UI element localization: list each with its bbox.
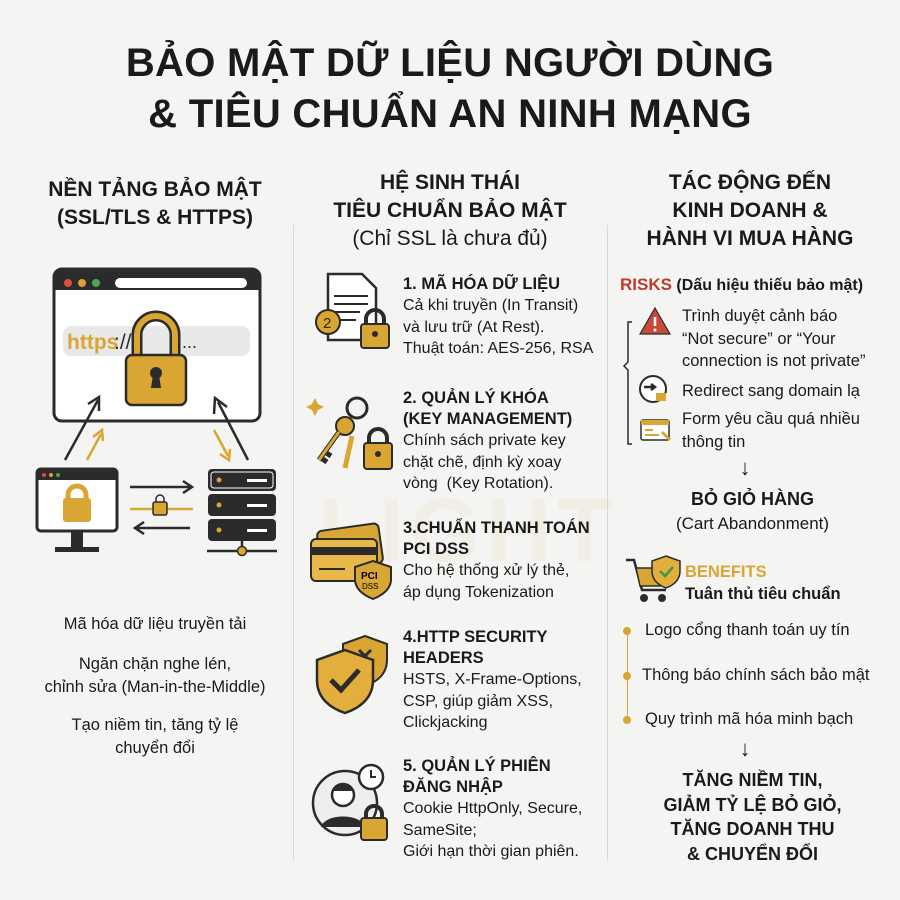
watermark: LIGHT — [318, 481, 618, 581]
item 5: session management: 5. QUẢN LÝ PHIÊN — [403, 757, 551, 775]
heading: left column — [48, 176, 262, 229]
icon: keys — [306, 396, 393, 470]
heading: risks: RISKS (Dấu hiệu thiếu bảo mật) — [620, 275, 863, 294]
item 5: session management — [312, 756, 582, 860]
heading: middle column: (Chỉ SSL là chưa đủ) — [352, 227, 548, 250]
heading: benefits: BENEFITS — [685, 563, 767, 581]
arrow: ↓ — [740, 736, 750, 761]
arrow: ↓ — [740, 455, 750, 480]
icon: document lock — [315, 272, 390, 349]
text block: left benefits: Mã hóa dữ liệu truyền tải Ngăn chặn nghe lén, — [64, 615, 246, 673]
icon: client monitor — [37, 469, 117, 552]
heading: right column — [647, 170, 853, 250]
item 4: HTTP security headers: HEADERS — [403, 649, 484, 667]
item 2: key management: chặt chẽ, định kỳ xoay — [403, 454, 561, 470]
browser window: :// — [114, 331, 132, 354]
heading: benefits — [685, 563, 841, 603]
risks list — [623, 306, 865, 450]
risks list: “Not secure” or “Your — [682, 330, 835, 348]
browser window: ... — [182, 332, 197, 352]
heading: right column: KINH DOANH & — [672, 199, 828, 222]
benefits list — [623, 621, 870, 728]
benefits list: Thông báo chính sách bảo mật — [642, 666, 870, 684]
result: final outcome — [663, 770, 842, 864]
heading: middle column: HỆ SINH THÁI — [380, 171, 520, 194]
icon: cart shield — [626, 555, 681, 602]
result: cart abandonment: BỎ GIỎ HÀNG — [691, 489, 814, 509]
icon: big padlock — [126, 316, 186, 405]
text block: left benefits: chỉnh sửa (Man-in-the-Middle) Tạo niềm tin, tăng tỷ lệ — [44, 678, 266, 734]
result: final outcome: TĂNG NIỀM TIN, — [682, 770, 822, 790]
item 1: data encryption: 1. MÃ HÓA DỮ LIỆU — [403, 275, 560, 293]
item 5: session management: ĐĂNG NHẬP — [403, 778, 503, 796]
heading: middle column: TIÊU CHUẨN BẢO MẬT — [333, 199, 567, 222]
risks list: Trình duyệt cảnh báo — [682, 307, 837, 325]
title — [126, 40, 774, 136]
icon: shields — [316, 634, 388, 714]
heading: left column: (SSL/TLS & HTTPS) — [57, 206, 253, 229]
title: & TIÊU CHUẨN AN NINH MẠNG — [148, 92, 752, 136]
item 1: data encryption: Cả khi truyền (In Transit) — [403, 297, 578, 314]
result: final outcome: GIẢM TỶ LỆ BỎ GIỎ, — [663, 794, 842, 814]
benefits list: Logo cổng thanh toán uy tín — [645, 621, 850, 639]
item 2: key management: 2. QUẢN LÝ KHÓA — [403, 389, 549, 407]
icon: user clock lock — [312, 764, 388, 841]
heading: middle column — [333, 170, 567, 250]
item 5: session management: SameSite; — [403, 822, 477, 838]
item 3: PCI DSS: 3.CHUẨN THANH TOÁN — [403, 519, 590, 537]
item 5: session management: Giới hạn thời gian phiên. — [403, 843, 579, 860]
browser window: https — [67, 331, 118, 354]
arrows — [65, 397, 248, 534]
text block: left benefits — [44, 615, 266, 757]
title: BẢO MẬT DỮ LIỆU NGƯỜI DÙNG — [126, 41, 774, 85]
item 3: PCI DSS: áp dụng Tokenization — [403, 584, 554, 600]
heading: left column: NỀN TẢNG BẢO MẬT — [48, 178, 262, 201]
item 4: HTTP security headers: HSTS, X-Frame-Options, — [403, 671, 582, 688]
item 4: HTTP security headers — [316, 628, 582, 731]
result: cart abandonment: (Cart Abandonment) — [676, 514, 829, 533]
item 4: HTTP security headers: CSP, giúp giảm XSS, — [403, 692, 553, 710]
item 4: HTTP security headers: Clickjacking — [403, 714, 487, 731]
heading: benefits: Tuân thủ tiêu chuẩn — [685, 585, 841, 603]
item 1: data encryption: Thuật toán: AES-256, RSA — [403, 340, 593, 357]
item 3: PCI DSS — [310, 518, 590, 600]
heading: right column: HÀNH VI MUA HÀNG — [647, 227, 853, 250]
heading: right column: TÁC ĐỘNG ĐẾN — [669, 171, 831, 194]
icon: document lock: 2 — [323, 315, 331, 332]
item 2: key management: Chính sách private key — [403, 432, 566, 449]
benefits list: Quy trình mã hóa minh bạch — [645, 710, 853, 728]
risks list: connection is not private” Redirect sang domain lạ Form yêu cầu quá nhiều — [682, 352, 865, 428]
icon: server — [207, 469, 277, 556]
result: cart abandonment — [676, 488, 829, 533]
icon: card PCI: PCI — [361, 571, 378, 582]
result: final outcome: TĂNG DOANH THU — [670, 819, 834, 839]
browser window — [54, 269, 260, 421]
item 1: data encryption: và lưu trữ (At Rest). — [403, 318, 544, 336]
item 3: PCI DSS: PCI DSS — [403, 540, 469, 558]
item 2: key management: vòng (Key Rotation). — [403, 475, 553, 492]
item 2: key management: (KEY MANAGEMENT) — [403, 410, 572, 428]
result: final outcome: & CHUYỂN ĐỔI — [687, 844, 818, 864]
item 3: PCI DSS: Cho hệ thống xử lý thẻ, — [403, 562, 569, 579]
item 4: HTTP security headers: 4.HTTP SECURITY — [403, 628, 548, 646]
risks list: thông tin — [682, 432, 745, 450]
illustration: HTTPS encryption — [36, 268, 277, 556]
item 2: key management — [306, 388, 572, 492]
item 1: data encryption — [315, 272, 594, 357]
item 5: session management: Cookie HttpOnly, Secure, — [403, 800, 582, 817]
text block: left benefits: chuyển đổi — [115, 739, 195, 757]
icon: card PCI — [310, 522, 392, 600]
icon: card PCI: DSS — [362, 582, 378, 591]
